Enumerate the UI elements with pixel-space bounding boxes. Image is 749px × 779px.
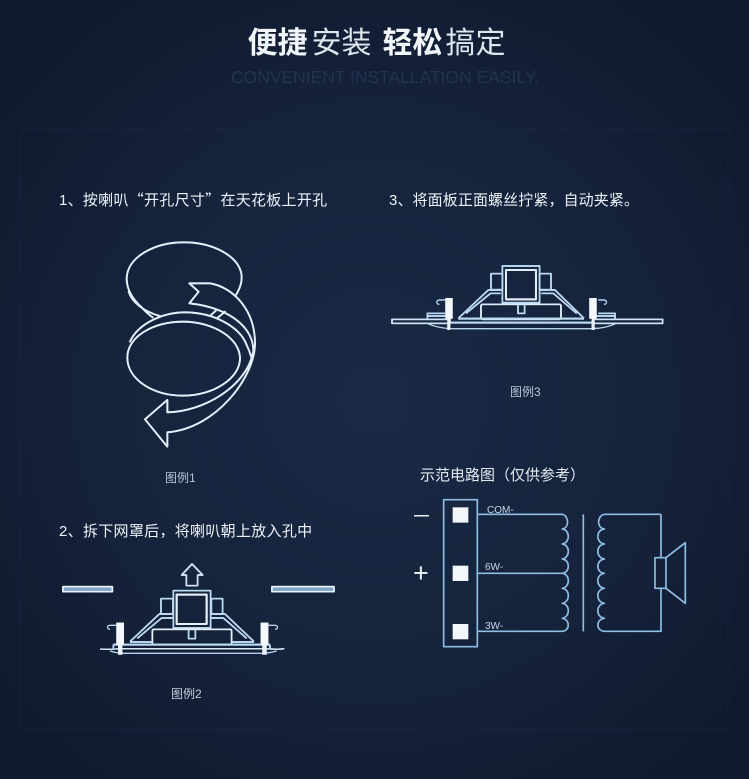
circuit heading: 示范电路图（仅供参考） [420,467,585,484]
speaker symbol [655,558,666,588]
label COM: COM- [487,505,514,516]
transformer core [581,514,586,631]
caption: figure 3: 图例3 [510,385,541,399]
primary coil [477,514,568,631]
speaker diagram: figure 3 [392,266,663,330]
label 3W: 3W- [485,621,503,632]
icon: hole rotation diagram [127,242,255,447]
icon: up arrow [182,564,203,586]
left ceiling panel [63,587,112,592]
circuit diagram [444,500,685,647]
subtitle: CONVENIENT INSTALLATION EASILY. [231,67,539,87]
caption: figure 1: 图例1 [165,471,196,485]
caption: figure 2: 图例2 [171,687,202,701]
label 6W: 6W- [485,562,503,573]
speaker diagram: figure 2 [63,564,334,655]
polarity plus: + [413,558,429,588]
secondary coil [598,514,661,631]
step 2 heading: 2、拆下网罩后，将喇叭朝上放入孔中 [59,523,312,540]
right ceiling panel [272,587,334,592]
terminal block [444,500,477,647]
title: 便捷安装 轻松搞定 [248,27,506,60]
step 3 heading: 3、将面板正面螺丝拧紧，自动夹紧。 [389,191,639,209]
step 1 heading: 1、按喇叭“开孔尺寸”在天花板上开孔 [59,189,327,210]
polarity minus: — [414,507,429,524]
